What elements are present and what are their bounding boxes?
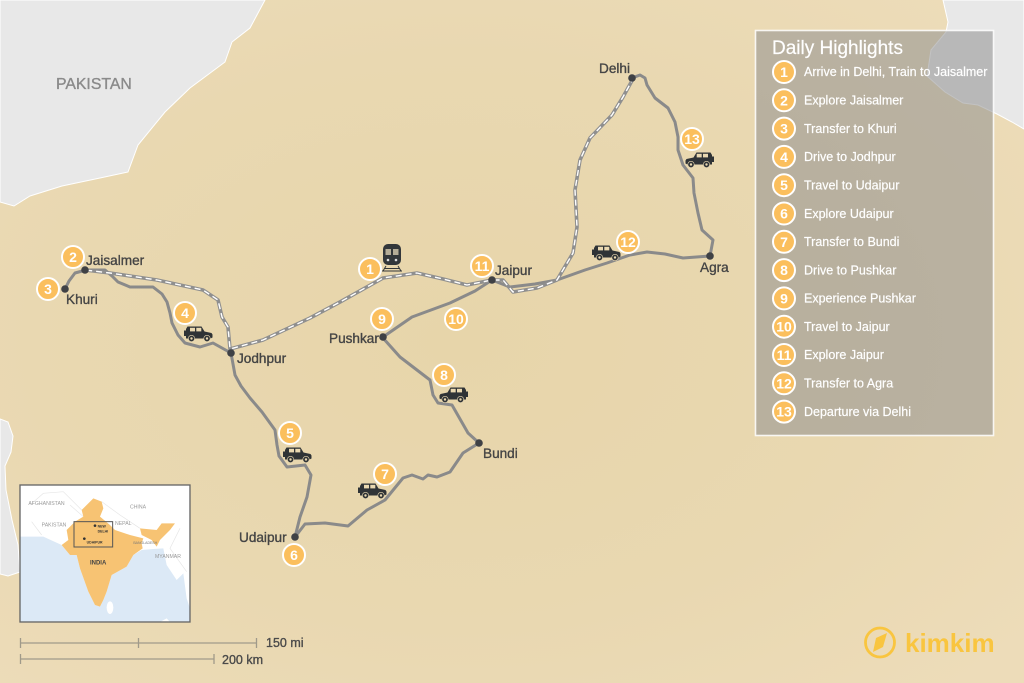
legend labels: Travel to Jaipur [804,320,890,334]
city labels: Agra [700,260,729,275]
inset country labels: NEPAL [115,521,132,527]
day marker numbers: 3 [44,281,52,297]
kimkim logo [866,628,995,658]
inset country labels: MYANMAR [155,554,181,560]
legend labels: Explore Udaipur [804,207,894,221]
legend labels [804,65,987,419]
region: Nepal and north [927,0,1024,129]
legend numbers: 3 [780,121,788,137]
day marker numbers: 12 [620,234,636,250]
legend numbers: 1 [780,64,788,80]
inset country labels: AFGHANISTAN [28,501,65,507]
icon: jeep day 8 [440,388,468,403]
icon: train [382,244,402,271]
icon: compass [866,628,894,657]
legend labels: Explore Jaipur [804,348,884,362]
legend labels: Travel to Udaipur [804,178,899,192]
city labels: Bundi [483,446,518,461]
day marker numbers: 13 [684,131,700,147]
legend labels: Transfer to Agra [804,376,893,390]
legend labels: Arrive in Delhi, Train to Jaisalmer [804,65,987,79]
legend numbers: 10 [776,319,792,335]
legend numbers: 9 [780,290,788,306]
legend labels: Explore Jaisalmer [804,94,903,108]
inset country labels: PAKISTAN [42,523,67,529]
inset India label: INDIA [90,561,107,567]
inset Sri Lanka [107,601,113,614]
legend numbers: 8 [780,262,788,278]
icon: jeep day 7 [358,484,386,499]
day marker numbers [44,131,700,563]
legend numbers: 6 [780,206,788,222]
legend numbers: 4 [780,149,788,165]
region: Pakistan [0,0,265,206]
legend labels: Drive to Jodhpur [804,150,896,164]
legend labels: Drive to Pushkar [804,264,896,278]
city labels: Jodhpur [237,351,287,366]
day marker numbers: 10 [448,311,464,327]
panel: daily highlights [756,30,994,436]
scale bar: miles: 150 mi [266,636,304,650]
inset locator map [20,485,190,622]
day marker numbers: 11 [475,258,490,274]
inset India [62,498,143,607]
icon: jeep day 4 [184,326,212,342]
day markers on map [37,128,703,566]
legend labels: Experience Pushkar [804,292,916,306]
wordmark: kimkim [905,628,995,658]
city labels: Pushkar [329,331,379,346]
day marker numbers: 4 [181,305,189,321]
day marker numbers: 5 [286,425,294,441]
city markers [61,74,714,541]
scale bar: kilometres: 200 km [222,653,263,667]
day marker numbers: 9 [378,311,386,327]
inset cities: UDAIPUR [87,540,103,544]
scale bar: miles [20,636,304,650]
inset borders [30,492,187,572]
day marker numbers: 1 [366,261,374,277]
legend numbers: 11 [777,347,792,363]
scale bar: kilometres [20,653,263,667]
icon: jeep day 12 [592,246,620,261]
inset cities [83,524,108,544]
legend labels: Transfer to Bundi [804,235,899,249]
legend labels: Transfer to Khuri [804,122,897,136]
day marker numbers: 2 [69,249,77,265]
legend numbers: 5 [780,177,788,193]
city labels: Khuri [66,292,98,307]
legend numbers: 7 [780,234,788,250]
route: road segments [65,75,713,537]
inset cities: NEW [98,524,106,528]
legend numbers: 13 [776,404,792,420]
inset northeast India [140,523,175,547]
region: southwest border [0,419,20,576]
route: train Delhi to Jaisalmer [85,77,634,349]
day marker numbers: 6 [290,547,298,563]
legend labels: Departure via Delhi [804,405,911,419]
inset frame [20,485,190,622]
inset country labels: CHINA [130,504,147,510]
legend numbers: 2 [780,92,788,108]
inset cities: DELHI [98,530,108,534]
icon: jeep day 13 [686,152,714,168]
city labels: Jaipur [495,263,532,278]
panel heading: Daily Highlights [772,38,903,59]
inset sea [20,537,190,622]
icon: jeep day 5 [283,448,312,463]
inset country labels [28,501,181,560]
city labels: Udaipur [239,530,287,545]
inset country labels: BANGLADESH [133,541,158,545]
label: Pakistan: PAKISTAN [56,76,132,93]
day marker numbers: 7 [381,466,389,482]
legend numbers [776,64,792,420]
legend numbers: 12 [776,375,792,391]
inset region box [74,522,113,547]
day marker numbers: 8 [440,367,448,383]
legend circles [773,61,795,423]
city labels: Delhi [599,61,630,76]
city labels [66,61,729,545]
city labels: Jaisalmer [86,253,145,268]
